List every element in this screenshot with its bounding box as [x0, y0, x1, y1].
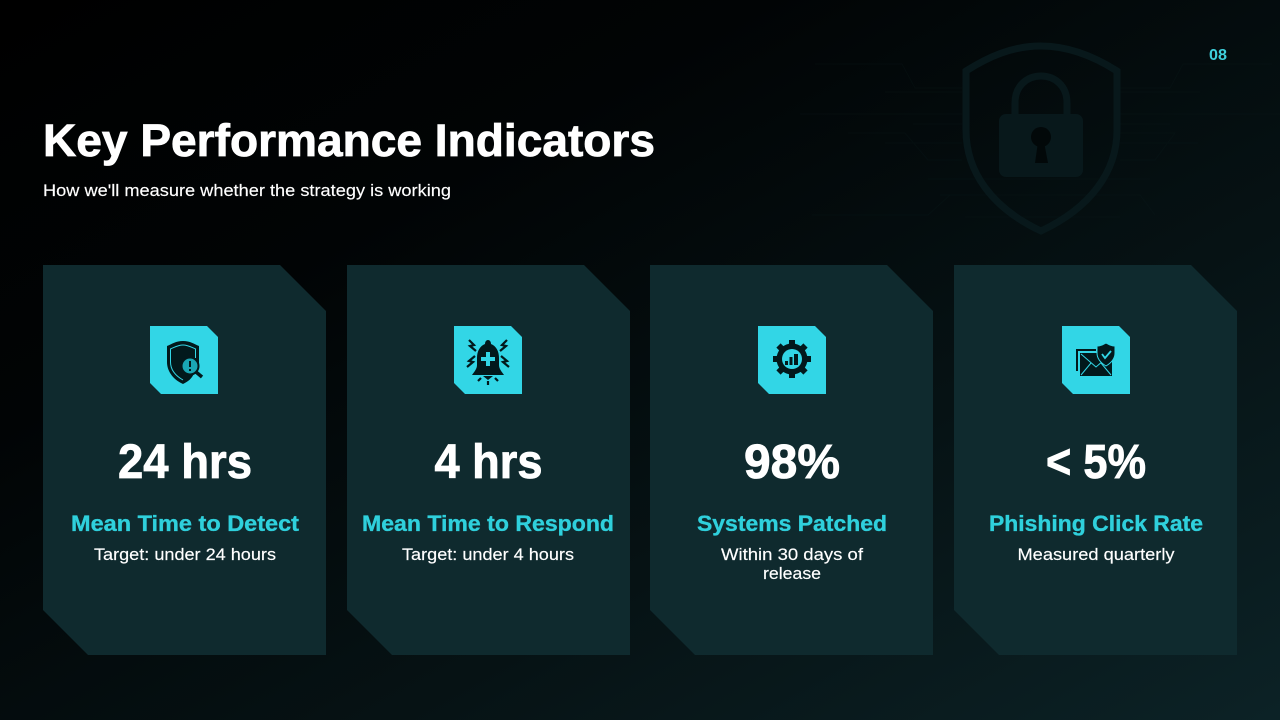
icon: alarm bell	[454, 326, 522, 394]
subtitle: How we'll measure whether the strategy is working	[43, 181, 451, 200]
description: release	[763, 565, 821, 583]
label: Mean Time to Respond	[362, 511, 614, 536]
title: Key Performance Indicators	[43, 115, 655, 166]
label: Mean Time to Detect	[71, 511, 300, 536]
description: Target: under 24 hours	[94, 546, 276, 564]
label: Phishing Click Rate	[989, 511, 1203, 536]
value: < 5%	[1046, 436, 1146, 489]
value: 98%	[744, 436, 840, 489]
label: Systems Patched	[697, 511, 887, 536]
panel: systems patched	[650, 265, 933, 655]
icon: envelope with shield check	[1062, 326, 1130, 394]
icon: gear with bar chart	[758, 326, 826, 394]
description: Measured quarterly	[1018, 546, 1175, 564]
page number: 08	[1209, 47, 1227, 64]
description: Within 30 days of	[721, 546, 863, 564]
description: Target: under 4 hours	[402, 546, 574, 564]
description	[721, 546, 863, 583]
watermark: shield with padlock	[966, 46, 1117, 231]
panel: mean time to detect	[43, 265, 326, 655]
value: 24 hrs	[118, 436, 252, 489]
panel: phishing click rate	[954, 265, 1237, 655]
value: 4 hrs	[434, 436, 542, 489]
icon: shield with magnifier	[150, 326, 218, 394]
panel: mean time to respond	[347, 265, 630, 655]
